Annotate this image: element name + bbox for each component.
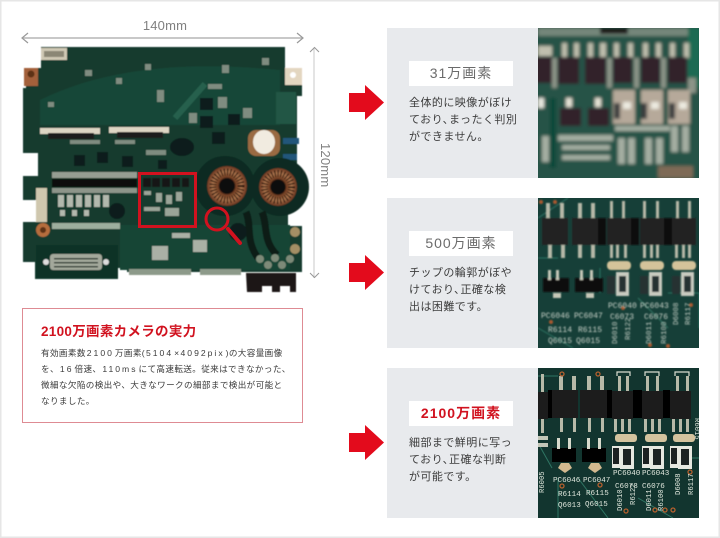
highlighted chips — [143, 178, 189, 187]
silkscreen labels: PC6047 — [574, 312, 603, 321]
description 31万画素 — [409, 96, 517, 142]
silkscreen labels: PC6040 — [613, 470, 641, 478]
silkscreen labels: R6115 — [578, 326, 602, 335]
silkscreen labels: PC6046 — [553, 477, 581, 485]
ic row — [52, 172, 137, 178]
panel: 500万画素 — [387, 198, 538, 348]
red selection rectangle — [140, 174, 196, 226]
arrow: width dimension — [22, 33, 303, 43]
silkscreen labels: Q6013 — [558, 502, 581, 510]
description 500万画素 — [409, 266, 512, 312]
label: 31万画素 — [409, 61, 513, 86]
description 500万画素: 出は困難です。 — [409, 300, 488, 312]
mounting holes and tabs — [24, 68, 38, 86]
description 2100万画素: 細部まで鮮明に写っ — [409, 436, 512, 448]
arrow: to 500 megapixel panel — [349, 255, 384, 290]
description 2100万画素: が可能です。 — [409, 470, 477, 482]
silkscreen labels: D6008 — [675, 473, 683, 495]
panel: 2100万画素 — [387, 368, 538, 518]
silkscreen labels: C6073 — [615, 483, 638, 491]
height label: 120mm: 120mm — [318, 143, 333, 187]
description 31万画素: 全体的に映像がぼけ — [409, 96, 512, 108]
arrow: to 31 megapixel panel — [349, 85, 384, 120]
toroidal coils — [195, 156, 255, 216]
traces and pads — [246, 212, 277, 258]
description 31万画素: ができません。 — [409, 130, 489, 142]
silkscreen labels: R6117 — [685, 302, 693, 325]
callout body text: なりました。 — [41, 396, 95, 406]
silkscreen labels — [539, 418, 700, 511]
silkscreen labels: R6122 — [625, 317, 633, 340]
connector bottom — [50, 254, 102, 270]
silkscreen labels: D6010 — [617, 489, 625, 511]
silkscreen labels: R6114 — [558, 491, 581, 499]
silkscreen labels: C6076 — [642, 483, 665, 491]
silkscreen labels: R6117 — [688, 473, 696, 495]
description 500万画素: けており、正確な検 — [409, 284, 506, 296]
silkscreen labels: R6122 — [630, 483, 638, 505]
silkscreen labels: PC6040 — [608, 302, 637, 311]
label: 500万画素 — [409, 231, 513, 256]
silkscreen labels: PC6047 — [583, 477, 610, 485]
silkscreen labels: D6011 — [646, 489, 654, 511]
panel: 31万画素 — [387, 28, 538, 178]
silkscreen labels: C6073 — [610, 313, 634, 322]
callout heading: 2100万画素カメラの実力 — [41, 324, 196, 339]
label: 500万画素: 500万画素 — [425, 235, 497, 251]
ribbon connectors — [40, 128, 100, 134]
photo: 500万画素 view — [538, 198, 699, 348]
capacitor — [248, 130, 280, 156]
callout body text: を、16倍速、110msにて高速転送。従来はできなかった、 — [41, 364, 291, 374]
callout body text — [41, 348, 291, 406]
arrow: height dimension — [310, 48, 319, 278]
silkscreen labels: R6005 — [539, 471, 547, 493]
description 500万画素: チップの輪郭がぼや — [409, 266, 512, 278]
icon: magnifying glass — [206, 208, 240, 243]
arrow: to 2100 megapixel panel — [349, 425, 384, 460]
silkscreen labels: PC6043 — [640, 302, 669, 311]
silkscreen labels: C6076 — [644, 313, 668, 322]
circuit board photo — [23, 47, 309, 292]
label: 31万画素: 31万画素 — [430, 65, 492, 81]
silkscreen labels: D6008 — [673, 302, 681, 325]
silkscreen labels: R6100 — [661, 321, 669, 344]
board dimensions and photo — [21, 18, 333, 293]
label: 2100万画素: 2100万画素 — [421, 405, 501, 421]
panel: camera capability callout — [22, 308, 303, 423]
callout body text: 有効画素数2100万画素(5104×4092pix)の大容量画像 — [41, 348, 283, 358]
silkscreen labels: Q6015 — [576, 337, 600, 346]
photo: sharp 2100万画素 view — [538, 368, 699, 518]
silkscreen labels: PC6046 — [541, 312, 570, 321]
silkscreen labels: Q6015 — [548, 337, 572, 346]
silkscreen labels: D6011 — [646, 321, 654, 344]
silkscreen labels: D6010 — [612, 321, 620, 344]
callout body text: 微細な欠陥の検出や、大きなワークの細部まで検出が可能と — [41, 380, 282, 390]
description 2100万画素: ており、正確な判断 — [409, 454, 506, 466]
upper circuit parts — [74, 98, 240, 219]
label: 2100万画素 — [409, 401, 513, 426]
silkscreen labels: R6100 — [658, 489, 666, 511]
silkscreen labels: Q6015 — [585, 501, 608, 509]
description 31万画素: ており、まったく判別 — [409, 114, 517, 126]
photo: blurred 31万画素 view — [538, 28, 699, 178]
width label: 140mm: 140mm — [143, 18, 187, 33]
silkscreen labels: R6115 — [586, 490, 609, 498]
description 2100万画素 — [409, 436, 512, 482]
silkscreen labels: PC6043 — [642, 470, 670, 478]
silkscreen labels — [541, 302, 693, 346]
silkscreen labels: R6114 — [548, 326, 572, 335]
